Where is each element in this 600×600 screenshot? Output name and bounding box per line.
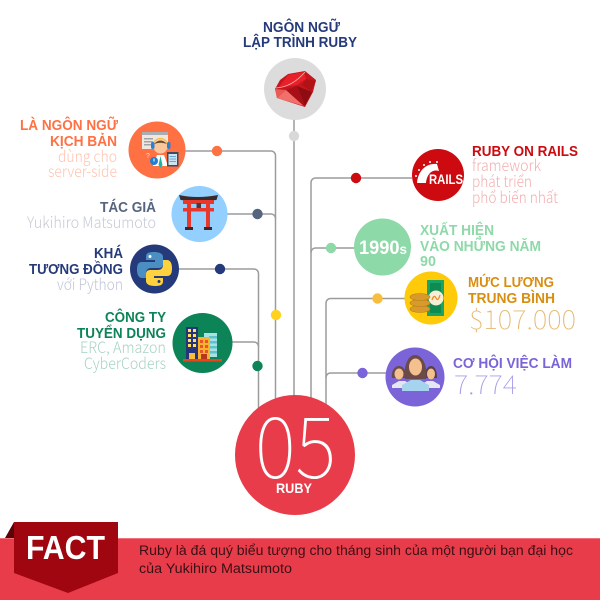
- connector dots: [212, 131, 383, 378]
- icon: people: [386, 348, 444, 406]
- text: similar to python: TƯƠNG ĐỒNG: [29, 260, 123, 278]
- icon: 1990s badge: [354, 218, 411, 276]
- text: scripting language: dùng cho: [58, 145, 117, 167]
- text: average salary: TRUNG BÌNH: [468, 290, 555, 307]
- text: hiring companies: [77, 308, 166, 374]
- icon: support agent: ?: [146, 153, 150, 160]
- icon: ruby gem: [264, 58, 326, 120]
- fact band: FACT: [26, 529, 105, 566]
- text: hiring companies: CyberCoders: [84, 352, 166, 374]
- text: appeared in the 90s: [420, 221, 541, 270]
- central red circle: [235, 380, 355, 515]
- text: job openings: CƠ HỘI VIỆC LÀM: [453, 354, 572, 372]
- title: NGÔN NGỮ: [263, 18, 341, 36]
- fact band: của Yukihiro Matsumoto: [139, 561, 292, 576]
- icon: 1990s badge: 1990s: [359, 238, 407, 259]
- text: author: [27, 199, 156, 233]
- text: scripting language: [20, 116, 119, 182]
- text: average salary: MỨC LƯƠNG: [468, 273, 554, 291]
- title: [243, 18, 357, 51]
- icon: rails logo: [412, 149, 464, 201]
- text: appeared in the 90s: VÀO NHỮNG NĂM: [420, 237, 541, 255]
- text: ruby on rails: phát triển: [472, 170, 532, 192]
- text: appeared in the 90s: 90: [420, 254, 436, 270]
- text: similar to python: [29, 245, 123, 295]
- text: similar to python: KHÁ: [94, 245, 123, 262]
- text: scripting language: KỊCH BẢN: [50, 133, 117, 150]
- icon: support agent: [128, 122, 186, 178]
- text: scripting language: server-side: [48, 160, 117, 182]
- text: ruby on rails: RUBY ON RAILS: [472, 144, 578, 160]
- icon: office buildings: [172, 313, 232, 373]
- icon: money: [404, 272, 458, 324]
- icon: rails logo: RAILS: [429, 171, 463, 187]
- text: hiring companies: ERC, Amazon: [80, 336, 166, 358]
- text: hiring companies: CÔNG TY: [105, 308, 166, 326]
- text: job openings: 7.774: [454, 365, 517, 402]
- text: similar to python: với Python: [57, 273, 123, 295]
- text: author: TÁC GIẢ: [100, 199, 156, 216]
- title: LẬP TRÌNH RUBY: [243, 33, 357, 51]
- text: average salary: [468, 273, 576, 337]
- text: author: Yukihiro Matsumoto: [27, 211, 156, 233]
- text: ruby on rails: phổ biến nhất: [472, 186, 558, 208]
- connector lines: [178, 118, 412, 410]
- fact band: [0, 522, 600, 600]
- text: job openings: [453, 354, 572, 402]
- fact band: Ruby là đá quý biểu tượng cho tháng sinh của một người bạn đại học: [139, 543, 573, 558]
- text: ruby on rails: [472, 144, 578, 208]
- text: appeared in the 90s: XUẤT HIỆN: [420, 221, 494, 239]
- central red circle: 05: [255, 380, 336, 503]
- text: ruby on rails: framework: [472, 154, 541, 176]
- central red circle: RUBY: [276, 480, 313, 496]
- text: hiring companies: TUYỂN DỤNG: [77, 324, 166, 342]
- text: scripting language: LÀ NGÔN NGỮ: [20, 116, 119, 134]
- icon: python logo: [130, 244, 179, 294]
- icon: torii gate: [172, 186, 228, 242]
- text: average salary: $107.000: [469, 300, 576, 337]
